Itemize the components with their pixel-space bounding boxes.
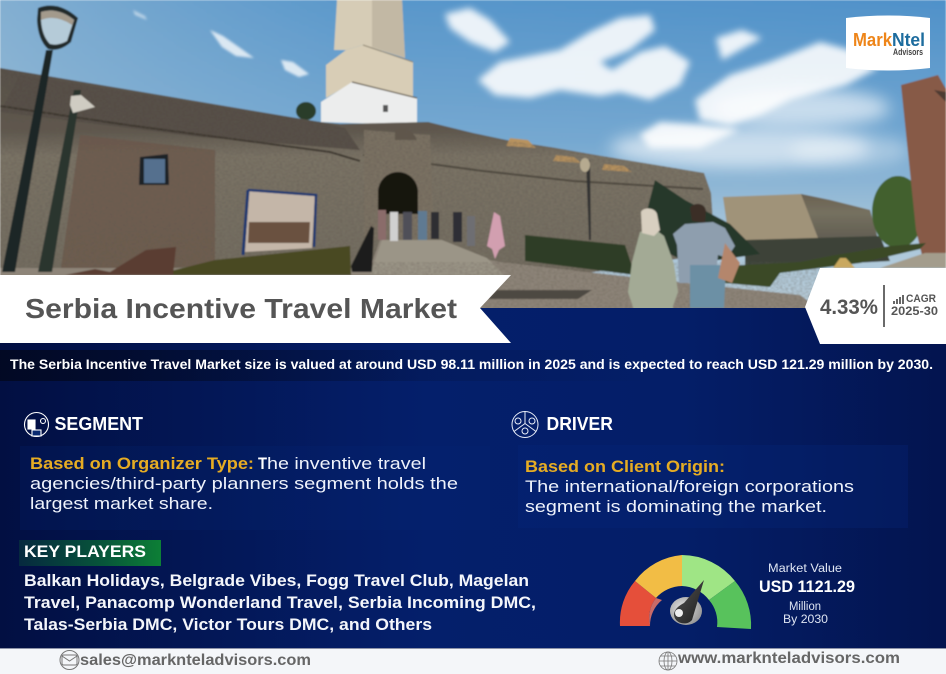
icon: web globe <box>659 652 677 670</box>
website address: www.marknteladvisors.com <box>677 650 900 667</box>
CAGR badge: 4.33% <box>820 296 878 319</box>
market value text <box>759 563 855 626</box>
summary strip: The Serbia Incentive Travel Market size is valued at around USD 98.11 million in 2025 and is expected to reach USD 121.29 million by 2030. <box>10 356 933 372</box>
driver description <box>525 457 854 516</box>
wooden sculpture <box>65 247 176 275</box>
visitors walking <box>628 204 740 310</box>
central tree <box>640 180 760 264</box>
market value text: By 2030 <box>783 614 828 626</box>
market value text: Market Value <box>768 563 842 575</box>
title banner: Serbia Incentive Travel Market <box>25 293 457 324</box>
CAGR badge: 2025-30 <box>891 306 938 318</box>
hedges <box>155 235 926 287</box>
stair railing <box>351 226 374 272</box>
heading: segment: SEGMENT <box>54 414 143 434</box>
icon: driver people circle <box>512 412 538 438</box>
footer bar <box>0 648 946 674</box>
ground <box>0 240 820 310</box>
panel: driver <box>512 412 908 528</box>
crowd at gate <box>378 210 505 259</box>
CAGR badge <box>805 268 946 344</box>
person near badge <box>833 258 855 268</box>
segment description: Based on Organizer Type: <box>30 454 254 473</box>
company list: Talas-Serbia DMC, Victor Tours DMC, and Others <box>24 615 432 634</box>
segment description <box>30 454 458 513</box>
segment description: he inventive travel <box>267 454 426 473</box>
navy background panel <box>0 308 946 649</box>
CAGR badge: CAGR <box>906 293 936 305</box>
information sign <box>243 190 316 255</box>
segment description: T <box>258 454 268 473</box>
trees right <box>872 176 924 248</box>
fortress wall <box>0 67 714 274</box>
panel: key players <box>19 540 536 634</box>
heading: key players <box>19 540 161 566</box>
company list: Balkan Holidays, Belgrade Vibes, Fogg Travel Club, Magelan <box>24 571 529 590</box>
icon: segment globe <box>24 412 48 436</box>
market value text: Million <box>789 601 821 613</box>
icon: email <box>60 650 79 670</box>
market value text: USD 1121.29 <box>759 577 855 596</box>
email address: sales@marknteladvisors.com <box>80 652 311 669</box>
heading: key players: KEY PLAYERS <box>24 542 146 561</box>
tower <box>321 0 417 125</box>
logo: MarkNtel Advisors: Mark <box>853 30 893 50</box>
gate arch <box>378 172 418 214</box>
dark window <box>139 154 169 185</box>
photo: Belgrade fortress with visitors <box>0 0 946 310</box>
summary strip <box>0 350 946 381</box>
driver description: Based on Client Origin: <box>525 457 725 476</box>
segment description: agencies/third-party planners segment holds the <box>30 474 458 493</box>
panel: segment <box>20 412 490 530</box>
tree behind wall <box>296 102 316 120</box>
title banner <box>0 275 511 343</box>
gauge: market value dial <box>620 555 751 629</box>
brick tower right <box>901 75 946 268</box>
street lamps <box>2 6 591 272</box>
logo: MarkNtel Advisors <box>846 16 930 70</box>
company list <box>24 571 536 634</box>
driver description: segment is dominating the market. <box>525 497 827 516</box>
logo: MarkNtel Advisors: Ntel <box>892 30 925 50</box>
second bastion <box>723 194 880 262</box>
logo: MarkNtel Advisors: Advisors <box>893 47 923 57</box>
company list: Travel, Panacomp Wonderland Travel, Serbia Incoming DMC, <box>24 593 536 612</box>
driver description: The international/foreign corporations <box>525 477 854 496</box>
clouds <box>133 8 910 168</box>
heading: driver: DRIVER <box>546 414 613 434</box>
segment description: largest market share. <box>30 494 213 513</box>
